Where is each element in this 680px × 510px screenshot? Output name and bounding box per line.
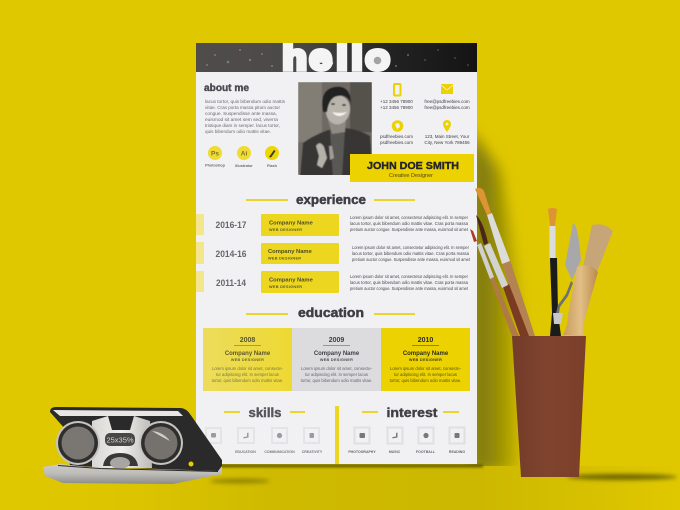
row 2014-16: Company Name	[268, 249, 313, 255]
interest section: MUSIC	[389, 450, 401, 454]
contact text: City, New York 789456	[424, 140, 470, 145]
paper shadow on wall	[470, 130, 524, 472]
row 2016-17: pretium auctor congue. Suspendisse ante massa, euismod sit amet	[350, 227, 469, 232]
column 2010: WEB DESIGNER	[409, 358, 442, 362]
interest section: interest	[386, 405, 438, 420]
cup body	[512, 336, 586, 477]
name box: JOHN DOE SMITH	[367, 160, 459, 172]
contact text: psdfreebies.com	[380, 140, 413, 145]
resume page	[196, 38, 477, 464]
software skill icons	[205, 146, 279, 168]
column 2009: WEB DESIGNER	[320, 358, 353, 362]
column 2009: tur adipiscing elit. In semper lacus	[305, 372, 368, 377]
column 2010	[381, 328, 470, 391]
skills section: EDUCATION	[235, 450, 256, 454]
binoculars	[43, 407, 270, 484]
contact block	[380, 84, 470, 145]
experience heading: experience	[296, 192, 366, 207]
row 2014-16: lacus tortor, quis bibendum odio mattis vitae. Cras porta massa	[352, 251, 470, 256]
interest section: PHOTOGRAPHY	[348, 450, 376, 454]
software skill icons: Ai	[241, 150, 247, 158]
contact text: +12 3456 78900	[380, 99, 413, 104]
contact text: free@psdfreebies.com	[424, 105, 470, 110]
education heading: education	[298, 305, 364, 320]
brush centre	[548, 208, 561, 336]
row 2014-16: Lorem ipsum dolor sit amet, consectetur adipiscing elit. In semper	[352, 245, 470, 250]
header band	[196, 43, 477, 72]
skills section: CREATIVITY	[302, 450, 323, 454]
row 2011-14: lacus tortor, quis bibendum odio mattis vitae. Cras porta massa	[350, 280, 469, 285]
column 2009: Lorem ipsum dolor sit amet, consecte-	[301, 366, 373, 371]
column 2009: 2009	[329, 337, 344, 344]
column 2008: Company Name	[225, 351, 271, 357]
row 2016-17: WEB DESIGNER	[269, 228, 302, 232]
contact text: psdfreebies.com	[380, 134, 413, 139]
icon: globe	[392, 120, 403, 132]
about me heading: about me	[204, 83, 249, 94]
column 2009: tortor, quis bibendum odio mattis vitae.	[301, 378, 372, 383]
interest section: FOOTBALL	[416, 450, 436, 454]
skills section: COMMUNICATION	[264, 450, 295, 454]
icon: envelope	[441, 84, 453, 94]
hello title: l	[336, 38, 348, 78]
column 2010: Lorem ipsum dolor sit amet, consecte-	[390, 366, 462, 371]
about me text: congue. Suspendisse ante massa,	[205, 111, 277, 116]
contact text	[380, 99, 470, 145]
hello title: e	[310, 38, 332, 78]
brushes left	[470, 188, 535, 336]
column 2008: Lorem ipsum dolor sit amet, consecte-	[212, 366, 284, 371]
hello title: o	[366, 38, 390, 78]
icon: location pin	[443, 120, 451, 132]
floor shadow	[215, 464, 483, 468]
row 2016-17: 2016-17	[216, 220, 246, 230]
row 2014-16: pretium auctor congue. Suspendisse ante massa, euismod sit amet	[352, 257, 471, 262]
row 2011-14: Company Name	[269, 278, 314, 284]
column 2010: tur adipiscing elit. In semper lacus	[394, 372, 457, 377]
row 2014-16: 2014-16	[216, 249, 246, 259]
column 2008: tortor, quis bibendum odio mattis vitae.	[212, 378, 283, 383]
education columns	[203, 328, 470, 391]
about me text: lacus tortor, quis bibendum odio mattis	[205, 99, 285, 104]
interest section	[348, 405, 465, 454]
row 2016-17	[196, 214, 469, 236]
row 2011-14: Lorem ipsum dolor sit amet, consectetur adipiscing elit. In semper	[350, 274, 469, 279]
binoculars: 25x35%	[106, 436, 134, 444]
software skill icons: Illustrator	[235, 164, 253, 168]
skills section: skills	[248, 405, 282, 420]
software skill icons: Flash	[267, 164, 278, 168]
portrait photo	[298, 82, 373, 178]
skills section	[206, 405, 323, 454]
software skill icons: Photoshop	[205, 164, 226, 168]
about me text: euismod sit amet sem sed, viverra	[205, 117, 279, 122]
name box	[350, 154, 474, 182]
vertical divider	[335, 406, 339, 464]
round brush	[563, 224, 613, 335]
about me text: tristique diam in semper. lacus tortor,	[205, 123, 280, 128]
brush cup	[470, 188, 677, 480]
column 2008: tur adipiscing elit. In semper lacus	[216, 372, 279, 377]
contact text: 123, Main Street, Your	[425, 134, 470, 139]
row 2014-16	[196, 242, 471, 264]
hello title	[282, 43, 391, 72]
row 2011-14: WEB DESIGNER	[269, 285, 302, 289]
row 2016-17: Company Name	[269, 220, 314, 226]
icon: phone	[394, 84, 400, 96]
contact text: +12 3456 78900	[380, 105, 413, 110]
column 2010: Company Name	[403, 351, 449, 357]
row 2011-14	[196, 271, 469, 293]
experience rows	[196, 214, 471, 293]
palette knife	[553, 223, 581, 324]
column 2009: Company Name	[314, 351, 360, 357]
column 2008: 2008	[240, 337, 255, 344]
software skill icons: Ps	[211, 150, 219, 158]
column 2008: WEB DESIGNER	[231, 358, 264, 362]
name box: Creative Designer	[389, 173, 433, 179]
about me text: vitae. Cras porta massa pitum auctor	[205, 105, 281, 110]
column 2010: 2010	[418, 337, 433, 344]
floor	[0, 466, 680, 510]
row 2016-17: lacus tortor, quis bibendum odio mattis vitae. Cras porta massa	[350, 221, 469, 226]
about me text: quis bibendum odio mattis vitae.	[205, 129, 271, 134]
contact text: free@psdfreebies.com	[424, 99, 470, 104]
row 2016-17: Lorem ipsum dolor sit amet, consectetur adipiscing elit. In semper	[350, 215, 469, 220]
row 2011-14: pretium auctor congue. Suspendisse ante massa, euismod sit amet	[350, 286, 469, 291]
column 2008	[203, 328, 292, 391]
hello title: h	[282, 38, 307, 78]
interest section: READING	[449, 450, 465, 454]
row 2014-16: WEB DESIGNER	[268, 256, 301, 260]
about me text	[205, 99, 285, 134]
column 2009	[292, 328, 381, 391]
hello title: l	[352, 38, 363, 78]
row 2011-14: 2011-14	[216, 278, 246, 288]
column 2010: tortor, quis bibendum odio mattis vitae.	[390, 378, 461, 383]
